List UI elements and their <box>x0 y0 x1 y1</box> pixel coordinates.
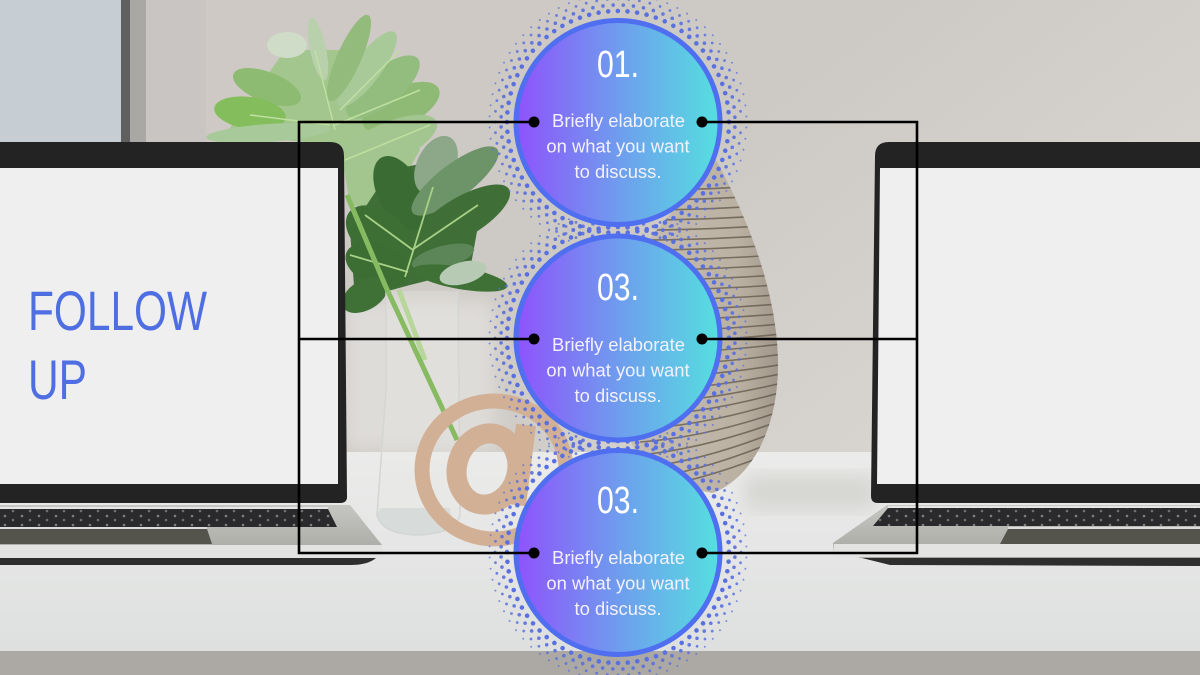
item 2 <box>516 236 720 440</box>
item 3 circle <box>516 450 720 654</box>
item 2 description: to discuss. <box>575 385 661 406</box>
item 2 description: Briefly elaborate <box>552 334 685 355</box>
plant: glass vase <box>377 290 460 535</box>
item 1 description: Briefly elaborate <box>552 110 685 131</box>
item 2 description: on what you want <box>546 360 690 380</box>
right laptop screen <box>877 168 1200 484</box>
item 3 description: to discuss. <box>575 598 661 619</box>
plant: lower dark leaf <box>334 129 519 320</box>
vase: ribbed ceramic <box>631 160 778 493</box>
at-sign ornament <box>422 401 566 539</box>
connector dots <box>528 116 708 558</box>
right laptop base <box>833 505 1200 566</box>
item 1 description: on what you want <box>546 136 690 156</box>
connector lines <box>299 122 917 553</box>
background photo: bright wall patch behind glass <box>345 300 495 450</box>
title: FOLLOW <box>28 279 207 342</box>
left laptop base <box>0 505 382 565</box>
halftone dots: circle 3 <box>490 424 746 675</box>
item 2 number: 03. <box>597 267 639 309</box>
plant: stem <box>347 195 457 440</box>
item 3 number: 03. <box>597 480 639 522</box>
background photo: wall <box>0 0 1200 452</box>
left laptop screen <box>0 168 338 484</box>
left laptop lid <box>0 142 347 503</box>
item 1 description: to discuss. <box>575 161 661 182</box>
item 1 number: 01. <box>597 44 639 86</box>
halftone dots: circle 1 <box>490 0 746 250</box>
right laptop <box>833 142 1200 566</box>
background photo: desk <box>0 452 1200 675</box>
item 3 <box>516 450 720 654</box>
item 1 <box>516 20 720 224</box>
item 3 description: Briefly elaborate <box>552 547 685 568</box>
right laptop lid <box>871 142 1200 503</box>
plant: upper light leaf <box>206 10 447 210</box>
title: UP <box>28 348 87 411</box>
item 2 circle <box>516 236 720 440</box>
background photo: window <box>0 0 206 145</box>
item 3 description: on what you want <box>546 572 690 594</box>
halftone dots: circle 2 <box>490 210 746 466</box>
title <box>28 279 207 411</box>
item 1 circle <box>516 20 720 224</box>
left laptop <box>0 142 382 565</box>
